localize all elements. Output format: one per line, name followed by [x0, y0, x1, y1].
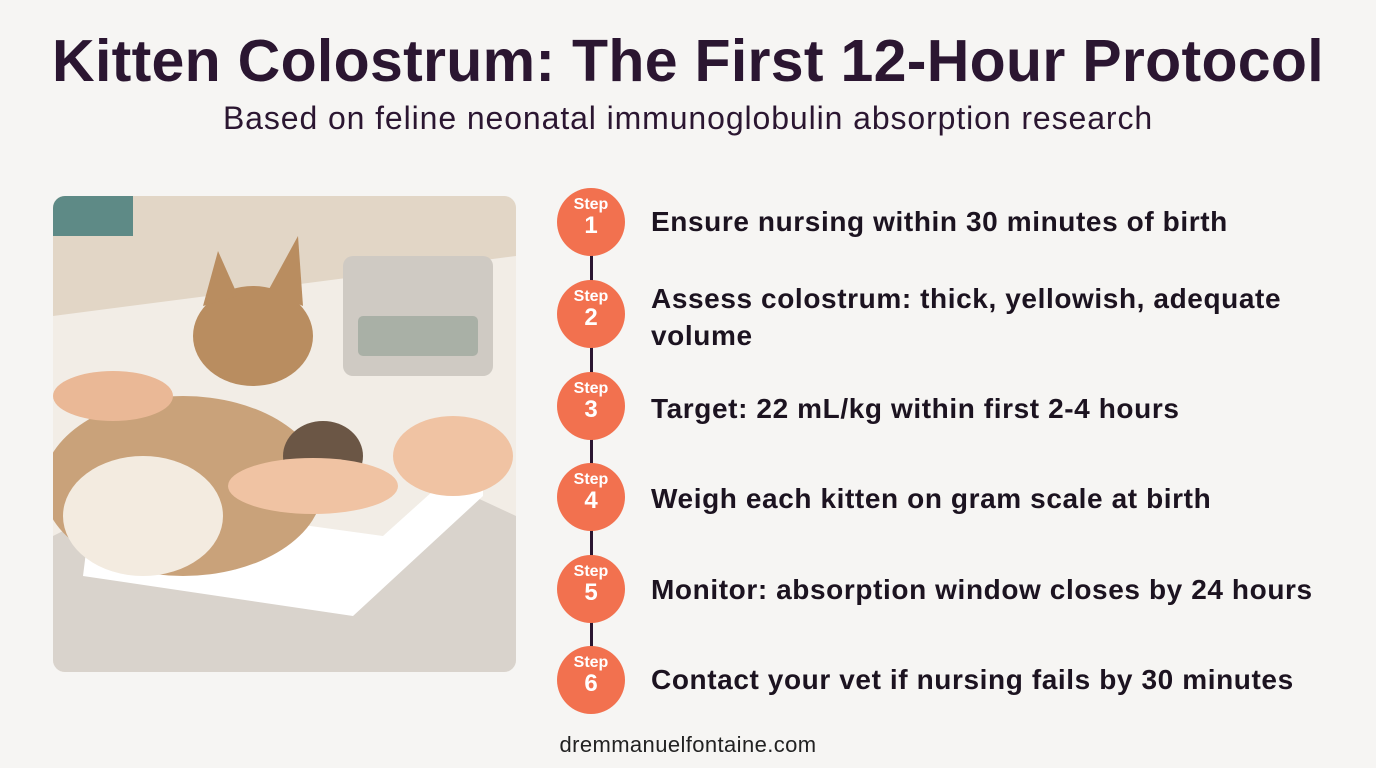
step 5 — [557, 555, 625, 623]
step 5: Step — [574, 563, 608, 580]
step 3: 3 — [584, 396, 598, 423]
step 6: 6 — [584, 670, 598, 697]
step 5: 5 — [584, 579, 598, 606]
step 3: Step — [574, 380, 608, 397]
text: Ensure nursing within 30 minutes of birth — [651, 206, 1228, 237]
title: Kitten Colostrum: The First 12-Hour Protocol — [52, 28, 1324, 94]
step 6: Step — [574, 654, 608, 671]
step 2: 2 — [584, 304, 598, 331]
step 4 — [557, 463, 625, 531]
step 1 — [557, 188, 625, 256]
text: Target: 22 mL/kg within first 2-4 hours — [651, 393, 1180, 424]
text: Assess colostrum: thick, yellowish, adequate volume — [651, 283, 1281, 351]
footer: dremmanuelfontaine.com — [559, 732, 817, 757]
step 1: Step — [574, 196, 608, 213]
step 1: 1 — [584, 212, 598, 239]
step 4: Step — [574, 471, 608, 488]
subtitle: Based on feline neonatal immunoglobulin absorption research — [223, 100, 1153, 136]
step 2 — [557, 280, 625, 348]
step 3 — [557, 372, 625, 440]
text: Monitor: absorption window closes by 24 hours — [651, 574, 1313, 605]
step 6 — [557, 646, 625, 714]
illustration: cat and kitten at vet — [53, 196, 516, 672]
text: Weigh each kitten on gram scale at birth — [651, 483, 1211, 514]
step 2: Step — [574, 288, 608, 305]
step 4: 4 — [584, 487, 598, 514]
text: Contact your vet if nursing fails by 30 minutes — [651, 664, 1294, 695]
